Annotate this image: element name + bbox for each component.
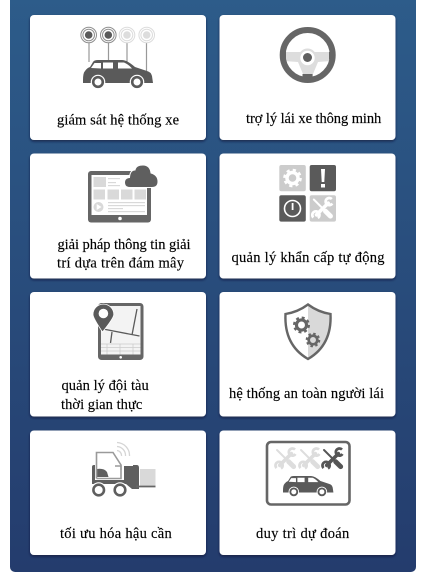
icon: steering wheel bbox=[280, 30, 335, 82]
label: trí dựa trên đám mây bbox=[57, 256, 185, 272]
label: hệ thống an toàn người lái bbox=[229, 386, 384, 402]
label bbox=[61, 378, 149, 413]
icon: shield with gears bbox=[285, 304, 331, 359]
label: giải pháp thông tin giải bbox=[58, 237, 190, 253]
label: trợ lý lái xe thông minh bbox=[246, 111, 382, 127]
icon: four status tiles bbox=[279, 165, 336, 222]
label: thời gian thực bbox=[61, 397, 142, 413]
card: predictive maintenance bbox=[220, 430, 396, 555]
card: cloud infotainment bbox=[30, 154, 206, 278]
card: automatic emergency management bbox=[220, 154, 396, 278]
card: smart driving assistant bbox=[220, 15, 396, 140]
card: real-time fleet management bbox=[30, 292, 206, 416]
label: quản lý khẩn cấp tự động bbox=[232, 250, 384, 266]
card: vehicle system monitoring bbox=[30, 15, 206, 140]
label bbox=[57, 237, 190, 272]
label: duy trì dự đoán bbox=[256, 526, 350, 542]
icon: car with sensors bbox=[81, 27, 154, 89]
label: giám sát hệ thống xe bbox=[57, 112, 179, 128]
icon: tablet map with pin bbox=[93, 303, 144, 360]
label: quản lý đội tàu bbox=[62, 378, 149, 394]
label: tối ưu hóa hậu cần bbox=[60, 526, 172, 542]
card: driver safety system bbox=[220, 292, 396, 416]
icon: tablet with cloud bbox=[88, 165, 158, 222]
icon: forklift bbox=[91, 442, 156, 498]
icon: tools and car in frame bbox=[267, 442, 350, 504]
card: logistics optimization bbox=[30, 430, 206, 555]
